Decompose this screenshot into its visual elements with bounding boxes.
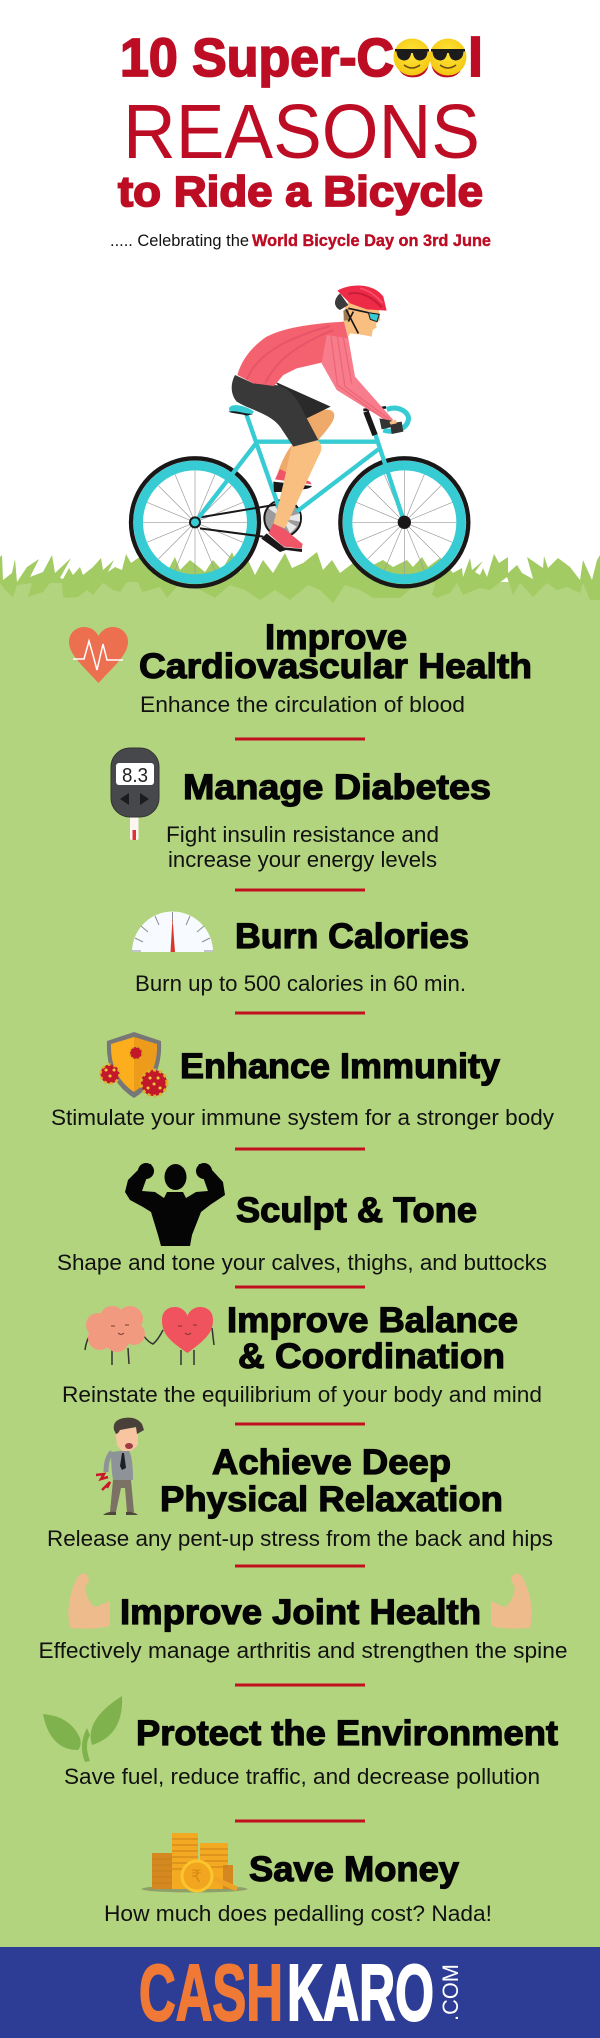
reason 3: calories (132, 912, 469, 996)
reason 7: relaxation (47, 1418, 553, 1551)
icon: leaves (43, 1696, 122, 1762)
reason 6: balance (62, 1301, 542, 1407)
reason 10: money (104, 1833, 492, 1926)
heading (227, 1301, 518, 1376)
icon: cool sunglasses emoji faces (394, 38, 466, 76)
title: oo (396, 28, 464, 88)
icon: man with back pain (96, 1418, 144, 1515)
reason 8: joint health (38, 1573, 568, 1663)
rider head and helmet (335, 286, 387, 337)
heading: Protect the Environment (136, 1714, 558, 1753)
heading: Sculpt & Tone (236, 1191, 477, 1230)
title: REASONS (123, 89, 480, 175)
subtitle (110, 232, 491, 250)
description: Release any pent-up stress from the back and hips (47, 1526, 553, 1551)
reason 5: sculpt (57, 1163, 547, 1275)
heading: Cardiovascular Health (139, 647, 532, 686)
icon: right flexed arm (491, 1573, 532, 1629)
saddle (228, 405, 254, 416)
icon: coin stacks with magnifier: ₹ (191, 1867, 202, 1886)
heading: & Coordination (238, 1337, 505, 1376)
bicycle and rider illustration (131, 286, 468, 586)
icon: glucose meter (111, 748, 159, 840)
subtitle: ..... Celebrating the (110, 232, 249, 250)
gloves (379, 418, 403, 434)
description: Enhance the circulation of blood (140, 692, 465, 717)
subtitle: World Bicycle Day on 3rd June (252, 232, 491, 250)
title: to Ride a Bicycle (118, 168, 483, 216)
icon: gauge (132, 912, 213, 952)
description: Shape and tone your calves, thighs, and buttocks (57, 1250, 547, 1275)
front wheel (340, 458, 468, 586)
icon: heart with ecg (69, 627, 128, 683)
bicycle frame (190, 413, 411, 529)
logo: CASHKARO (139, 1948, 463, 2037)
heading: Save Money (249, 1850, 460, 1889)
reason 4: immunity (51, 1032, 554, 1130)
heading: Improve Joint Health (120, 1593, 481, 1632)
logo: CASHKARO: .COM (438, 1964, 463, 2021)
reason 1: cardiovascular (69, 618, 532, 717)
icon: glucose meter: 8.3 (122, 765, 148, 787)
description: Reinstate the equilibrium of your body and mind (62, 1382, 542, 1407)
heading (160, 1443, 503, 1519)
heading: Achieve Deep (212, 1443, 451, 1482)
heading: Physical Relaxation (160, 1480, 503, 1519)
description: Burn up to 500 calories in 60 min. (135, 971, 466, 996)
rider front leg and shoe (232, 375, 321, 552)
heading: Improve (265, 618, 407, 657)
logo: CASHKARO: KARO (287, 1948, 434, 2037)
handlebar (363, 407, 409, 435)
title: 10 Super-C (120, 28, 394, 88)
icon: left flexed arm (68, 1573, 110, 1629)
description: How much does pedalling cost? Nada! (104, 1901, 492, 1926)
rider back leg and shoe (273, 382, 334, 492)
description: Save fuel, reduce traffic, and decrease pollution (64, 1764, 540, 1789)
description: Fight insulin resistance and (166, 822, 439, 847)
description: increase your energy levels (168, 847, 437, 872)
reason 2: diabetes (111, 748, 491, 872)
grass (0, 552, 600, 603)
reason 9: environment (43, 1696, 558, 1789)
icon: shield with viruses (100, 1032, 167, 1098)
description: Stimulate your immune system for a stronger body (51, 1105, 554, 1130)
heading: Manage Diabetes (183, 768, 491, 807)
title: l (468, 28, 483, 88)
icon: muscular silhouette (125, 1163, 225, 1246)
icon: brain and heart holding hands (85, 1306, 214, 1365)
description: Effectively manage arthritis and strengthen the spine (38, 1638, 568, 1663)
rear wheel (131, 458, 259, 586)
rider jersey (237, 322, 393, 422)
logo: CASHKARO: CASH (139, 1948, 283, 2037)
heading: Burn Calories (235, 917, 469, 956)
icon: coin stacks with magnifier (142, 1833, 248, 1892)
title (118, 28, 483, 216)
description (166, 822, 439, 872)
heading: Enhance Immunity (180, 1047, 501, 1086)
footer band with logo (0, 1947, 600, 2038)
chainring and chain (200, 500, 301, 537)
heading (139, 618, 532, 686)
heading: Improve Balance (227, 1301, 518, 1340)
